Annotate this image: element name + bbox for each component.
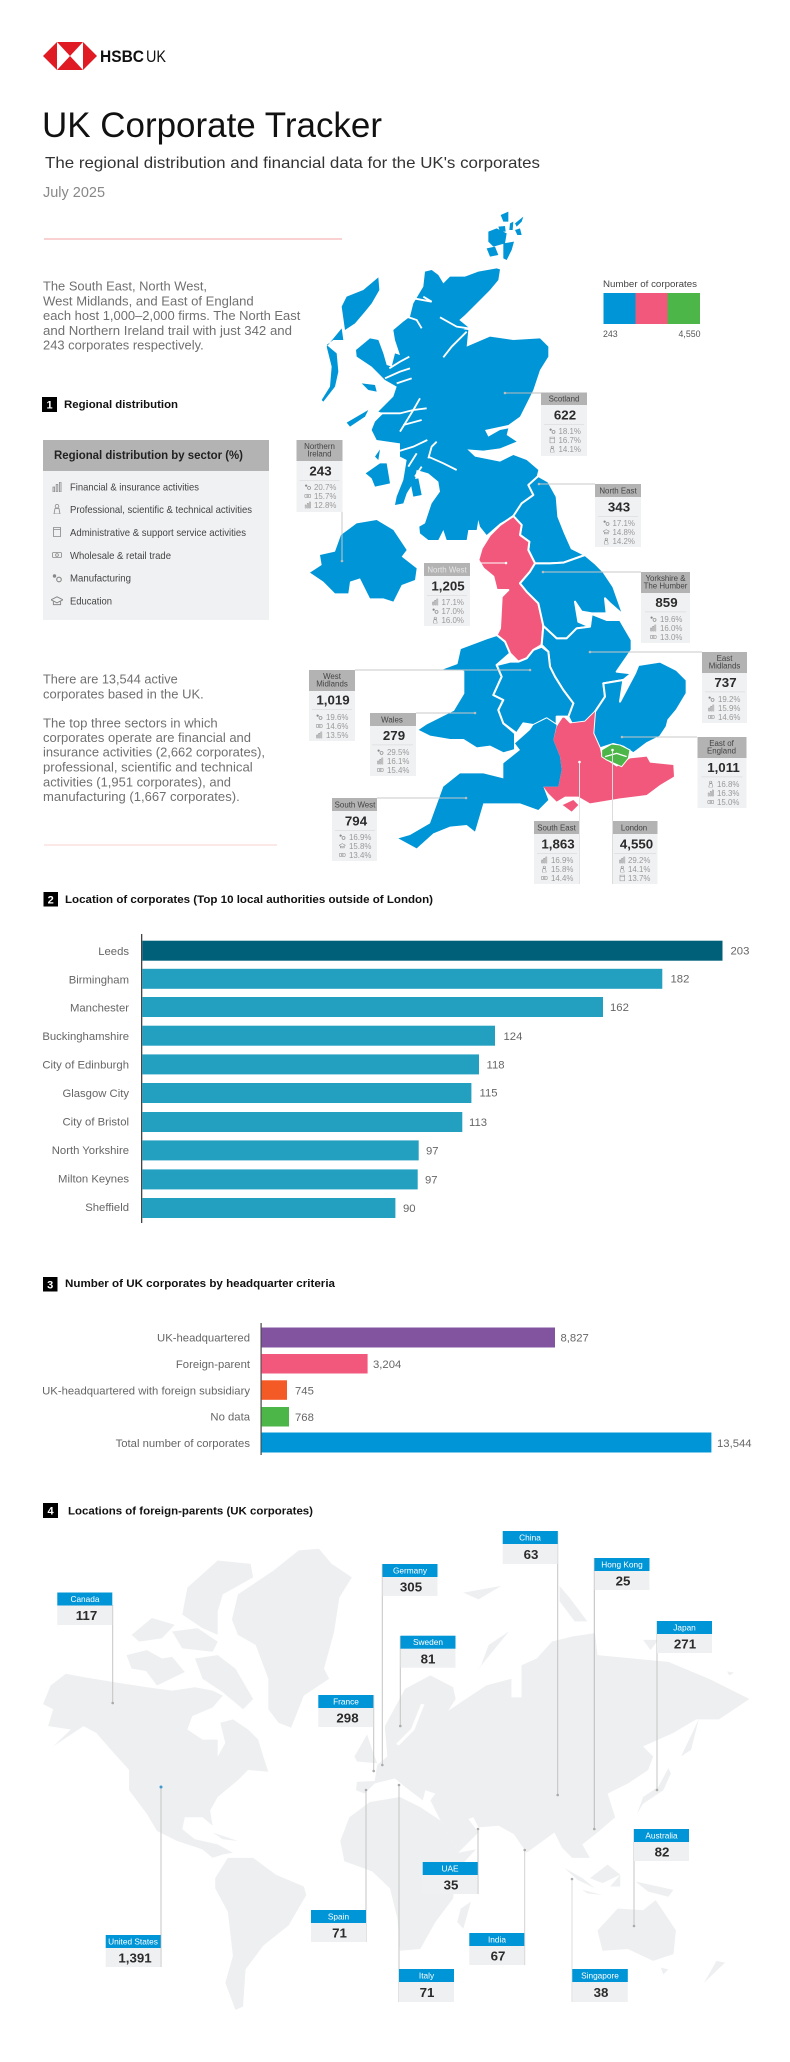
callout: Spain: [311, 1789, 367, 1942]
world map: [43, 1549, 749, 2010]
callout: Yorkshire and The Humber: [542, 571, 690, 643]
section 3 heading: Number of UK corporates by headquarter criteria: [65, 1278, 336, 1290]
callout: East of England: 16.3%: [717, 789, 739, 798]
callout: Wales: 15.4%: [387, 766, 409, 775]
callout: China: China: [519, 1532, 541, 1542]
callout: United States: [106, 1786, 162, 1967]
bar: Milton Keynes: 97: [425, 1174, 438, 1186]
bar: Glasgow City: [62, 1083, 498, 1103]
callout: Japan: 271: [674, 1636, 697, 1652]
callout: France: 298: [336, 1710, 359, 1726]
callout: East Midlands: 737: [714, 675, 737, 690]
section 3 heading: 3: [47, 1280, 53, 1292]
callout: North West: 17.1%: [442, 598, 464, 607]
callout: Hong Kong: Hong Kong: [601, 1560, 643, 1570]
callout: London: 14.1%: [628, 865, 650, 874]
bar: Leeds: [98, 941, 749, 961]
section 1 heading: [42, 397, 178, 412]
panel: sector legend: Professional, scientific & technical activities: [70, 505, 252, 516]
callout: India: India: [488, 1934, 506, 1944]
section 1 heading: Regional distribution: [64, 399, 178, 411]
date: July 2025: [43, 185, 105, 201]
bar: Glasgow City: 115: [480, 1088, 498, 1100]
callout: Hong Kong: 25: [616, 1574, 631, 1588]
callout: West Midlands: Midlands: [316, 680, 348, 688]
bar chart: headquarter criteria: [42, 1323, 752, 1455]
callout: Singapore: [571, 1878, 628, 2002]
title: UK Corporate Tracker: [42, 106, 382, 145]
callout: East of England: 16.8%: [717, 780, 739, 789]
bar: Manchester: [70, 997, 629, 1017]
callout: Northern Ireland: 20.7%: [314, 483, 336, 492]
callout: North West: 17.0%: [442, 607, 464, 616]
callout: East Midlands: 14.6%: [718, 713, 740, 722]
callout: North West: 1,205: [431, 578, 465, 594]
summary text: professional, scientific and technical: [43, 760, 253, 775]
callout: West Midlands: 1,019: [316, 692, 350, 708]
callout: London: 4,550: [620, 836, 653, 852]
callout: North West: [424, 562, 507, 626]
bar: Total number of corporates: Total number of corporates: [116, 1438, 250, 1450]
panel: sector legend: [43, 440, 269, 620]
logo: HSBC UK: UK: [146, 47, 167, 66]
map: North America: [43, 1674, 268, 1858]
callout: West Midlands: 13.5%: [326, 731, 348, 740]
callout: Japan: [656, 1621, 712, 1791]
intro text: and Northern Ireland trail with just 342 and: [43, 323, 292, 338]
callout: Scotland: 622: [554, 408, 576, 422]
intro text: The South East, North West,: [43, 279, 207, 294]
section 4 heading: Locations of foreign-parents (UK corporates): [68, 1506, 313, 1518]
callout: East Midlands: 15.9%: [718, 704, 740, 713]
bar: North Yorkshire: North Yorkshire: [52, 1145, 129, 1157]
summary text: manufacturing (1,667 corporates).: [43, 789, 240, 804]
callout: London: 29.2%: [628, 856, 650, 865]
bar: City of Bristol: 113: [469, 1117, 487, 1129]
summary text: There are 13,544 active: [43, 671, 178, 686]
bar: UK-headquartered: UK-headquartered: [157, 1332, 250, 1344]
callout: Hong Kong: [593, 1558, 650, 1830]
summary text: The top three sectors in which: [43, 715, 218, 730]
callout: Northern Ireland: [296, 440, 343, 562]
summary text: insurance activities (2,662 corporates),: [43, 745, 265, 760]
map: Orkney and Shetland: [487, 212, 523, 260]
summary text: [43, 671, 265, 804]
callout: London: [611, 749, 658, 884]
bar: UK-headquartered with foreign subsidiary: 745: [295, 1386, 314, 1398]
map: South America: [215, 1858, 306, 2010]
bar: Buckinghamshire: 124: [504, 1031, 522, 1043]
callout: North West: North West: [427, 566, 467, 574]
bar: UK-headquartered with foreign subsidiary: UK-headquartered with foreign subsidiary: [42, 1386, 250, 1398]
callout: Italy: [398, 1784, 454, 2002]
callout: Wales: 29.5%: [387, 748, 409, 757]
callout: South West: 16.9%: [349, 833, 371, 842]
callout: France: [318, 1695, 375, 1772]
callout: China: [503, 1531, 559, 1796]
panel: sector legend: Regional distribution by sector (%): [54, 448, 243, 462]
callout: East of England: [621, 736, 746, 808]
bar: City of Edinburgh: [42, 1054, 505, 1074]
map: Greenland: [232, 1549, 352, 1728]
callout: South East: 14.4%: [551, 874, 573, 883]
map legend: 243: [603, 329, 618, 339]
bar: North Yorkshire: 97: [426, 1146, 439, 1158]
callout: South West: 794: [345, 814, 368, 828]
callout: Australia: 82: [655, 1844, 669, 1860]
bar: Manchester: Manchester: [70, 1002, 129, 1014]
callout: Sweden: [399, 1636, 456, 1727]
bar: Manchester: 162: [610, 1002, 629, 1014]
callout: East Midlands: [589, 651, 747, 723]
callout: Sweden: 81: [421, 1651, 436, 1666]
callout: Yorkshire and The Humber: The Humber: [644, 582, 688, 590]
callout: West Midlands: [309, 669, 531, 741]
callout: UAE: UAE: [441, 1864, 459, 1874]
callout: North East: 14.2%: [612, 537, 635, 546]
summary text: corporates operate are financial and: [43, 730, 251, 745]
section 2 heading: 2: [48, 894, 54, 906]
bar: Birmingham: 182: [670, 974, 689, 986]
callout: Sweden: Sweden: [413, 1637, 443, 1647]
intro text: each host 1,000–2,000 firms. The North East: [43, 308, 301, 323]
map: Arctic islands: [127, 1561, 253, 1709]
callout: North East: North East: [599, 486, 637, 496]
panel: sector legend: Wholesale & retail trade: [70, 551, 171, 562]
callout: Northern Ireland: 243: [309, 464, 332, 478]
section 1 heading: 1: [46, 400, 53, 412]
panel: sector legend: Manufacturing: [70, 574, 131, 584]
callout: UAE: [423, 1828, 479, 1894]
bar: City of Bristol: [62, 1112, 487, 1132]
logo: HSBC UK: [43, 42, 167, 70]
callout: Scotland: 14.1%: [558, 445, 581, 454]
callout: India: [469, 1849, 526, 1965]
bar: Birmingham: [69, 969, 689, 989]
bar: Sheffield: 90: [403, 1203, 416, 1215]
callout: South West: 15.8%: [349, 842, 371, 851]
map legend: 4,550: [678, 329, 701, 339]
bar: Foreign-parent: 3,204: [373, 1359, 401, 1371]
bar: Birmingham: Birmingham: [69, 974, 129, 986]
callout: North West: 16.0%: [442, 616, 464, 625]
bar: Buckinghamshire: Buckinghamshire: [42, 1031, 129, 1043]
callout: Singapore: Singapore: [581, 1970, 619, 1980]
callout: Northern Ireland: Northern: [304, 442, 335, 451]
callout: UAE: 35: [444, 1878, 459, 1892]
callout: South West: [332, 797, 467, 861]
callout: South East: 16.9%: [551, 856, 573, 865]
section 4 heading: 4: [47, 1506, 54, 1518]
callout: London: London: [621, 824, 647, 832]
bar: City of Bristol: City of Bristol: [62, 1116, 129, 1128]
callout: Italy: Italy: [419, 1970, 435, 1980]
bar: Glasgow City: Glasgow City: [62, 1088, 129, 1100]
bar: Milton Keynes: Milton Keynes: [58, 1174, 129, 1186]
bar: Total number of corporates: 13,544: [717, 1438, 752, 1450]
callout: East of England: 1,011: [707, 760, 740, 775]
callout: West Midlands: 19.6%: [326, 713, 348, 722]
bar: Leeds: 203: [730, 946, 749, 958]
callout: Germany: 305: [400, 1580, 423, 1594]
callout: France: France: [333, 1696, 359, 1706]
callout: Yorkshire and The Humber: 19.6%: [660, 615, 682, 624]
callout: Wales: 279: [383, 728, 405, 743]
callout: Northern Ireland: 15.7%: [314, 492, 336, 501]
callout: East Midlands: 19.2%: [718, 695, 740, 704]
map: Scotland and islands: [322, 268, 548, 540]
callout: Northern Ireland: 12.8%: [314, 501, 336, 510]
callout: North East: 14.8%: [612, 528, 635, 537]
map legend: Number of corporates: [603, 279, 698, 289]
callout: Yorkshire and The Humber: Yorkshire &: [645, 574, 686, 583]
callout: Canada: 117: [76, 1608, 97, 1623]
callout: Canada: Canada: [70, 1594, 100, 1604]
callout: Wales: Wales: [381, 716, 403, 724]
map legend: [603, 279, 701, 339]
callout: Germany: [381, 1564, 438, 1766]
callout: South West: 13.4%: [349, 851, 371, 860]
callout: Wales: 16.1%: [387, 757, 409, 766]
bar: Milton Keynes: [58, 1169, 438, 1189]
bar: North Yorkshire: [52, 1140, 439, 1160]
section 2 heading: Location of corporates (Top 10 local authorities outside of London): [65, 894, 433, 906]
bar: No data: [210, 1407, 314, 1426]
bar: City of Edinburgh: City of Edinburgh: [42, 1060, 129, 1072]
callout: Yorkshire and The Humber: 16.0%: [660, 624, 682, 633]
bar: UK-headquartered: [157, 1328, 589, 1348]
callout: East of England: 15.0%: [717, 798, 739, 807]
callout: Wales: [370, 712, 476, 776]
bar: No data: 768: [295, 1412, 314, 1424]
callout: East of England: England: [707, 746, 736, 756]
panel: sector legend: Administrative & support service activities: [70, 528, 246, 539]
map: Eurasia: [356, 1633, 749, 1858]
callout: South East: [534, 761, 581, 884]
intro text: West Midlands, and East of England: [43, 293, 254, 308]
callout: South West: South West: [335, 800, 376, 810]
callout: Australia: [633, 1829, 689, 1927]
callout: Scotland: 16.7%: [558, 436, 581, 445]
callout: United States: 1,391: [118, 1950, 152, 1966]
bar chart: top 10 local authorities: [42, 934, 749, 1223]
bar: Sheffield: [85, 1198, 416, 1218]
bar: Foreign-parent: Foreign-parent: [176, 1359, 251, 1371]
summary text: activities (1,951 corporates), and: [43, 775, 231, 790]
callout: North East: [538, 483, 641, 547]
panel: sector legend: Education: [70, 596, 112, 608]
bar: UK-headquartered: 8,827: [560, 1332, 589, 1344]
logo: HSBC UK: HSBC: [100, 47, 144, 66]
bar: Total number of corporates: [116, 1432, 752, 1452]
callout: South East: 1,863: [541, 836, 575, 852]
callout: Japan: Japan: [673, 1622, 696, 1632]
callout: Northern Ireland: Ireland: [307, 450, 332, 458]
callout: Scotland: [504, 392, 587, 456]
callout: Singapore: 38: [594, 1985, 608, 2000]
callout: South East: South East: [537, 824, 577, 832]
callout: United States: United States: [108, 1936, 158, 1946]
callout: Scotland: 18.1%: [558, 427, 581, 436]
callout: India: 67: [491, 1948, 505, 1964]
map: regions of England, Wales and Northern Ireland: [310, 476, 687, 848]
callout: East of England: East of: [709, 739, 735, 748]
bar: Leeds: Leeds: [98, 946, 129, 958]
callout: Italy: 71: [420, 1985, 435, 2000]
callout: Yorkshire and The Humber: 13.0%: [660, 633, 682, 642]
callout: Scotland: Scotland: [549, 394, 579, 404]
callout: South East: 15.8%: [551, 865, 573, 874]
bar: Foreign-parent: [176, 1354, 401, 1374]
bar: No data: No data: [210, 1412, 251, 1424]
intro text: [43, 279, 301, 352]
map: Africa: [340, 1797, 476, 1951]
bar: Buckinghamshire: [42, 1026, 522, 1046]
map: Oceania and Asian islands: [463, 1586, 734, 1983]
bar: City of Edinburgh: 118: [486, 1060, 505, 1072]
panel: sector legend: Financial & insurance activities: [70, 482, 199, 494]
subtitle: The regional distribution and financial data for the UK's corporates: [45, 155, 540, 172]
UK map: [310, 212, 687, 848]
callout: Canada: [57, 1592, 114, 1704]
callout: Spain: 71: [332, 1926, 347, 1940]
callout: London: 13.7%: [628, 874, 650, 883]
callout: China: 63: [524, 1547, 538, 1562]
bar: UK-headquartered with foreign subsidiary: [42, 1380, 314, 1400]
callout: Yorkshire and The Humber: 859: [655, 595, 678, 610]
callout: East Midlands: Midlands: [709, 662, 740, 670]
callout: West Midlands: West: [323, 672, 342, 681]
callout: West Midlands: 14.6%: [326, 722, 348, 731]
callout: North East: 343: [608, 500, 630, 514]
bar: Sheffield: Sheffield: [85, 1202, 129, 1214]
callout: Germany: Germany: [393, 1566, 428, 1576]
callout: Spain: Spain: [328, 1912, 349, 1922]
callout: East Midlands: East: [717, 654, 733, 663]
callout: North East: 17.1%: [612, 519, 635, 528]
callout: Australia: Australia: [645, 1830, 678, 1840]
intro text: 243 corporates respectively.: [43, 337, 204, 352]
summary text: corporates based in the UK.: [43, 686, 204, 701]
